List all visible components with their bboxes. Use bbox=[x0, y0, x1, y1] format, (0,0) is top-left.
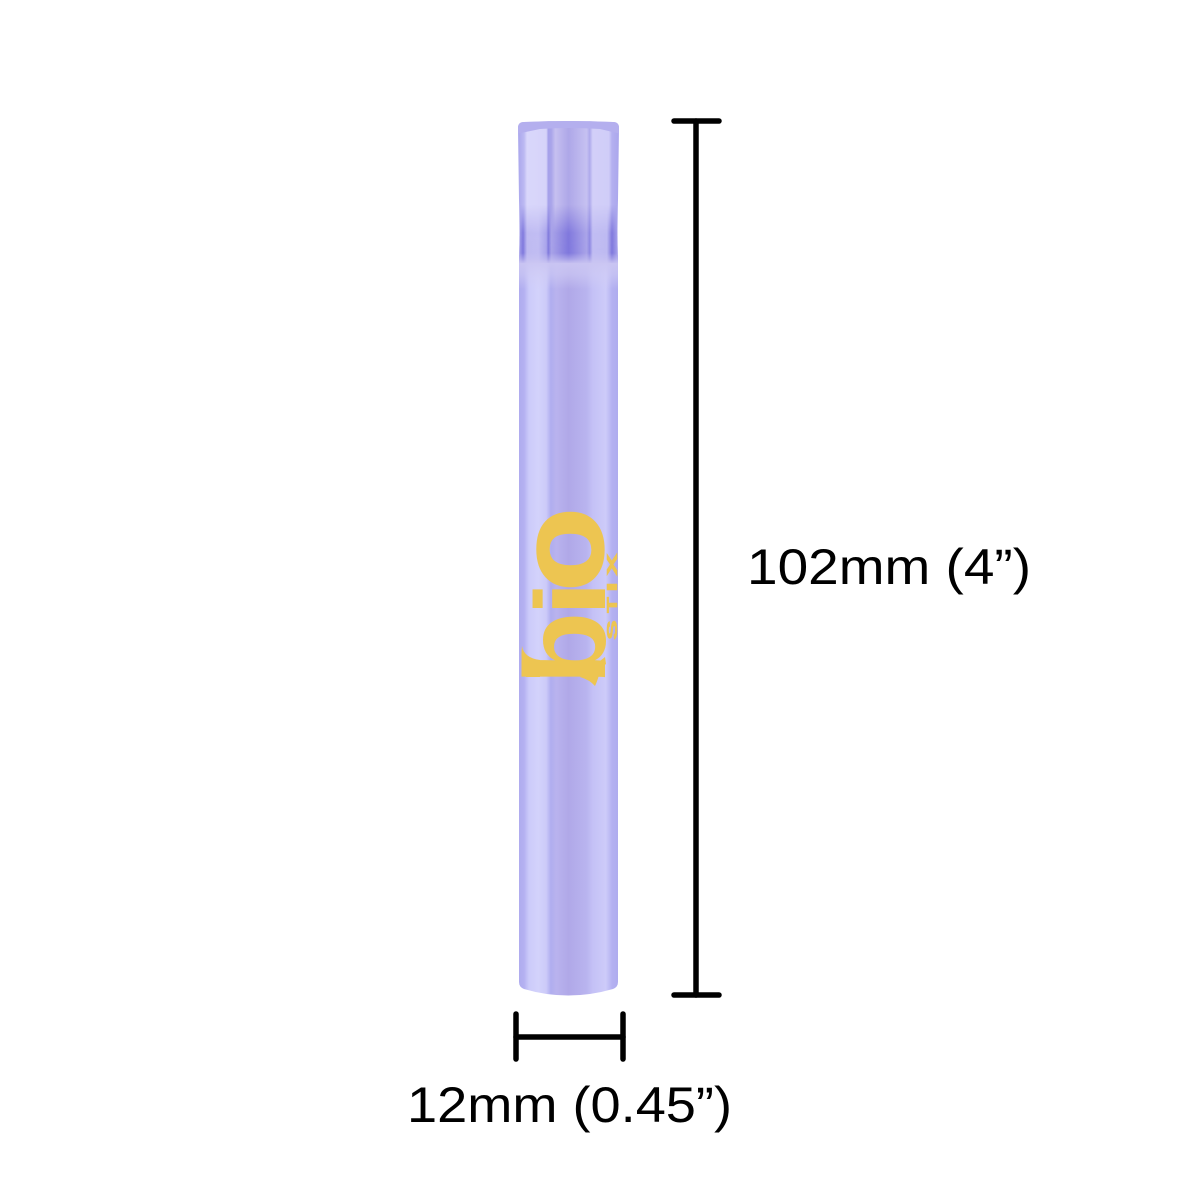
stix letter T: T bbox=[605, 597, 620, 613]
width dimension bracket bbox=[516, 1014, 623, 1059]
logo word stix bbox=[604, 553, 620, 640]
dark ring band bbox=[518, 205, 619, 263]
logo b hook bbox=[522, 646, 540, 677]
tube top section bbox=[518, 120, 619, 260]
tube rim bbox=[518, 121, 619, 133]
logo letter o: o bbox=[494, 508, 629, 592]
frosted ring bbox=[519, 254, 618, 284]
logo: bio stix bbox=[494, 508, 629, 686]
stix letter I: I bbox=[604, 582, 620, 592]
stix letter S: S bbox=[604, 620, 620, 640]
height dimension bracket bbox=[674, 121, 719, 995]
logo letter i: i bbox=[515, 580, 627, 618]
infographic: product dimensions bbox=[411, 118, 1028, 1132]
width label: 12mm (0.45”) bbox=[407, 1077, 732, 1133]
stix letter X: X bbox=[604, 553, 620, 576]
tube body bbox=[518, 255, 619, 1000]
glass tube bbox=[516, 120, 621, 1000]
logo b tail bbox=[580, 657, 606, 686]
height label: 102mm (4”) bbox=[747, 539, 1031, 595]
logo letter b: b bbox=[501, 612, 629, 685]
